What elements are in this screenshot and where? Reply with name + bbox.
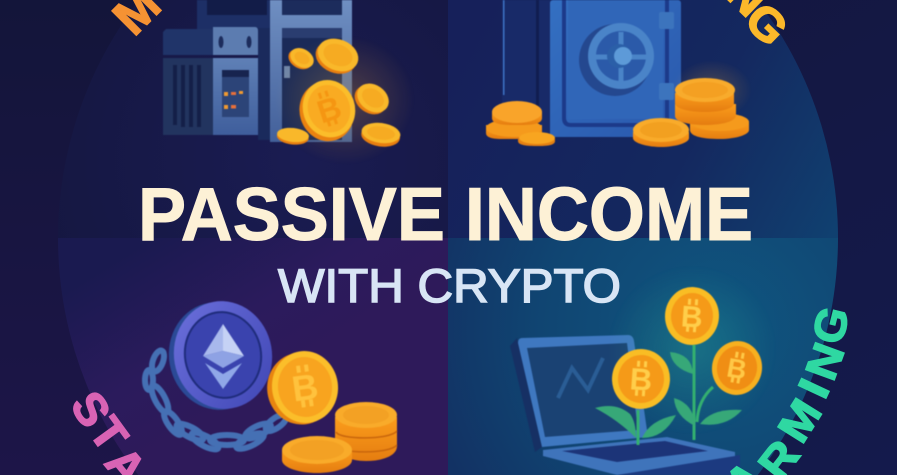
icon: plant coin right [708,337,766,399]
icon: plant coin right: B [725,353,749,385]
subtitle: WITH CRYPTO [278,259,621,312]
label: farming: N [796,336,854,386]
icon: server tower [197,0,352,142]
icon: plant coin top: B [680,300,704,335]
label: farming: I [789,372,840,405]
icon: left coin stack [486,101,555,146]
label: staking [73,392,142,475]
icon: chain [145,349,289,452]
panel: mining [163,0,415,165]
icon: bitcoin coin: B [289,365,321,410]
icon: mining coins [275,32,415,165]
label: staking: T [80,407,138,461]
icon: ethereum coin [160,293,281,418]
label: farming [730,308,848,475]
panel: yield farming [510,265,777,475]
icon: plant coin top [663,285,721,347]
label: farming: G [802,302,859,349]
icon: mining coins: B [313,89,346,130]
icon: laptop [510,335,740,475]
title: PASSIVE INCOME [138,172,753,256]
label: farming: M [768,390,831,451]
icon: plants [595,265,777,445]
icon: server box [163,27,258,135]
icon: staking coin stack [282,402,397,473]
panel: lending [486,0,752,147]
panel: staking [145,293,397,473]
label: staking: S [61,382,121,436]
icon: bitcoin coin [262,347,343,429]
icon: right coin stack [633,60,752,147]
icon: safe dial [579,23,654,96]
icon: plant coin left [610,347,672,411]
icon: plant coin left: B [629,361,653,398]
label: lending [727,0,786,44]
icon: safe [502,0,681,137]
